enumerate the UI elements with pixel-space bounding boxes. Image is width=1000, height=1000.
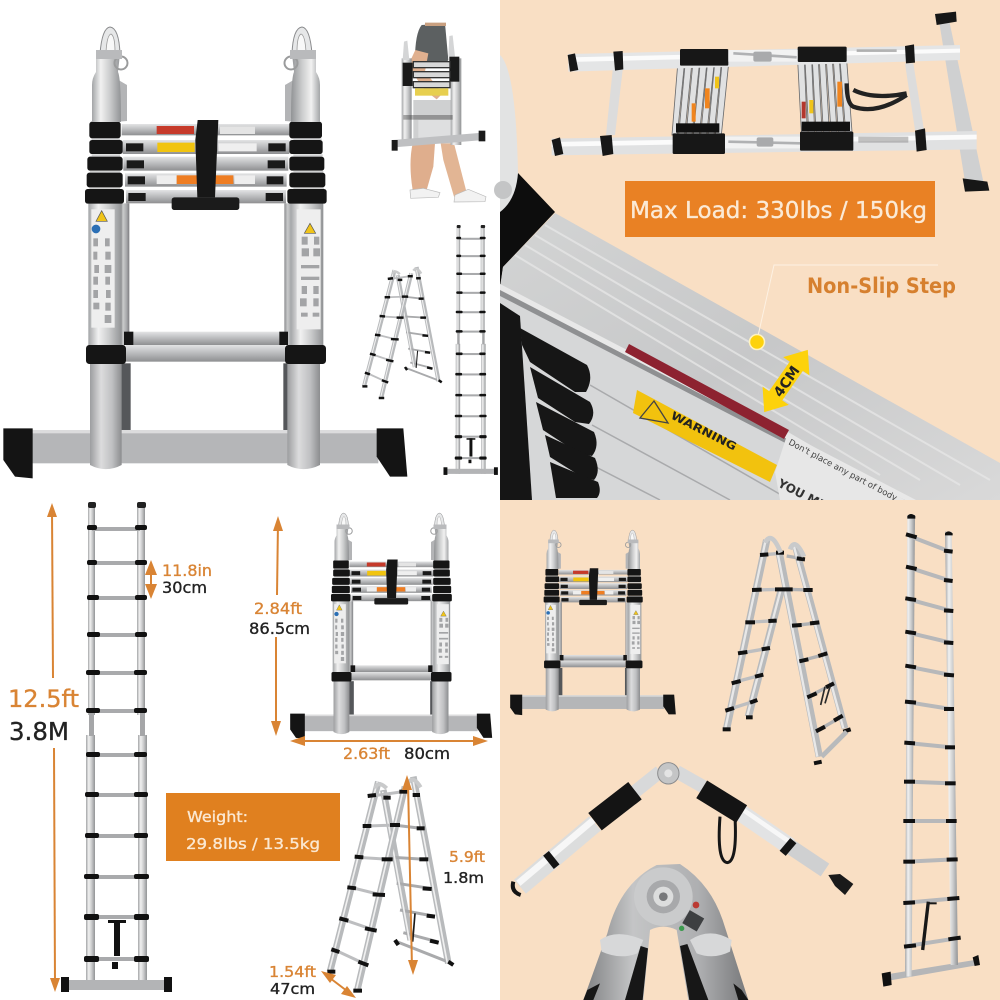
illustration: extended configuration [882,514,980,987]
label: step caution text: Don't place any part of body [787,438,899,504]
dimension: 4cm step width: 4CM [771,363,804,400]
label: 12.5ft: 12.5ft [8,685,79,713]
dimension: rung spacing arrow [145,560,157,599]
illustration: a-frame ladder [327,777,453,991]
callout: weight: 29.8lbs / 13.5kg [186,835,320,853]
dimension: 4cm step width [751,341,821,421]
illustration: folded configuration [510,530,676,715]
illustration: a-frame configuration [723,538,851,763]
illustration: folded ladder lying flat [552,12,989,192]
dimension: total length arrows [47,503,60,992]
illustration: large folded ladder [3,27,407,478]
label: 30cm: 30cm [162,578,207,597]
callout: max load [625,181,935,237]
dimension: folded height arrows [271,516,283,736]
dimension: folded width arrow [290,736,488,746]
label: 47cm: 47cm [270,980,315,998]
label: step caution text [775,432,905,513]
illustration: folded-open tube hinge [513,763,853,895]
label: 86.5cm: 86.5cm [249,619,310,638]
label: 80cm: 80cm [404,744,450,763]
callout: weight: Weight: [187,808,248,826]
label: 1.54ft: 1.54ft [269,963,316,981]
callout leader and dot [750,265,938,350]
illustration: close-up of non-slip step [494,55,1000,513]
label: non-slip step: Non-Slip Step [807,274,956,298]
illustration: person carrying ladder [392,23,486,202]
callout: weight [166,793,340,861]
label: 5.9ft: 5.9ft [449,848,485,866]
panel: load and step detail [494,0,1000,513]
dimension: a-frame height arrow [402,775,418,975]
panel: ladder configurations [500,500,1000,1000]
illustration: small extended ladder [443,225,498,475]
panel: folded ladder overview [3,23,498,478]
label: 2.63ft: 2.63ft [343,744,390,763]
label: 11.8in: 11.8in [162,561,212,580]
label: 3.8M: 3.8M [9,717,69,746]
label: 1.8m: 1.8m [443,869,484,887]
illustration: hinge close-up [583,864,748,1000]
label: warning sticker [633,390,777,482]
label: step caution text: YOU MU [775,476,830,513]
illustration: extended ladder [61,502,172,992]
label: warning sticker: WARNING [669,409,739,453]
callout: max load: Max Load: 330lbs / 150kg [630,198,927,224]
dimension: a-frame depth arrow [321,971,356,998]
illustration: folded ladder with dimensions [290,513,492,739]
label: 2.84ft: 2.84ft [254,599,302,618]
illustration: small a-frame ladder [362,267,442,398]
panel: dimensions [8,502,492,998]
